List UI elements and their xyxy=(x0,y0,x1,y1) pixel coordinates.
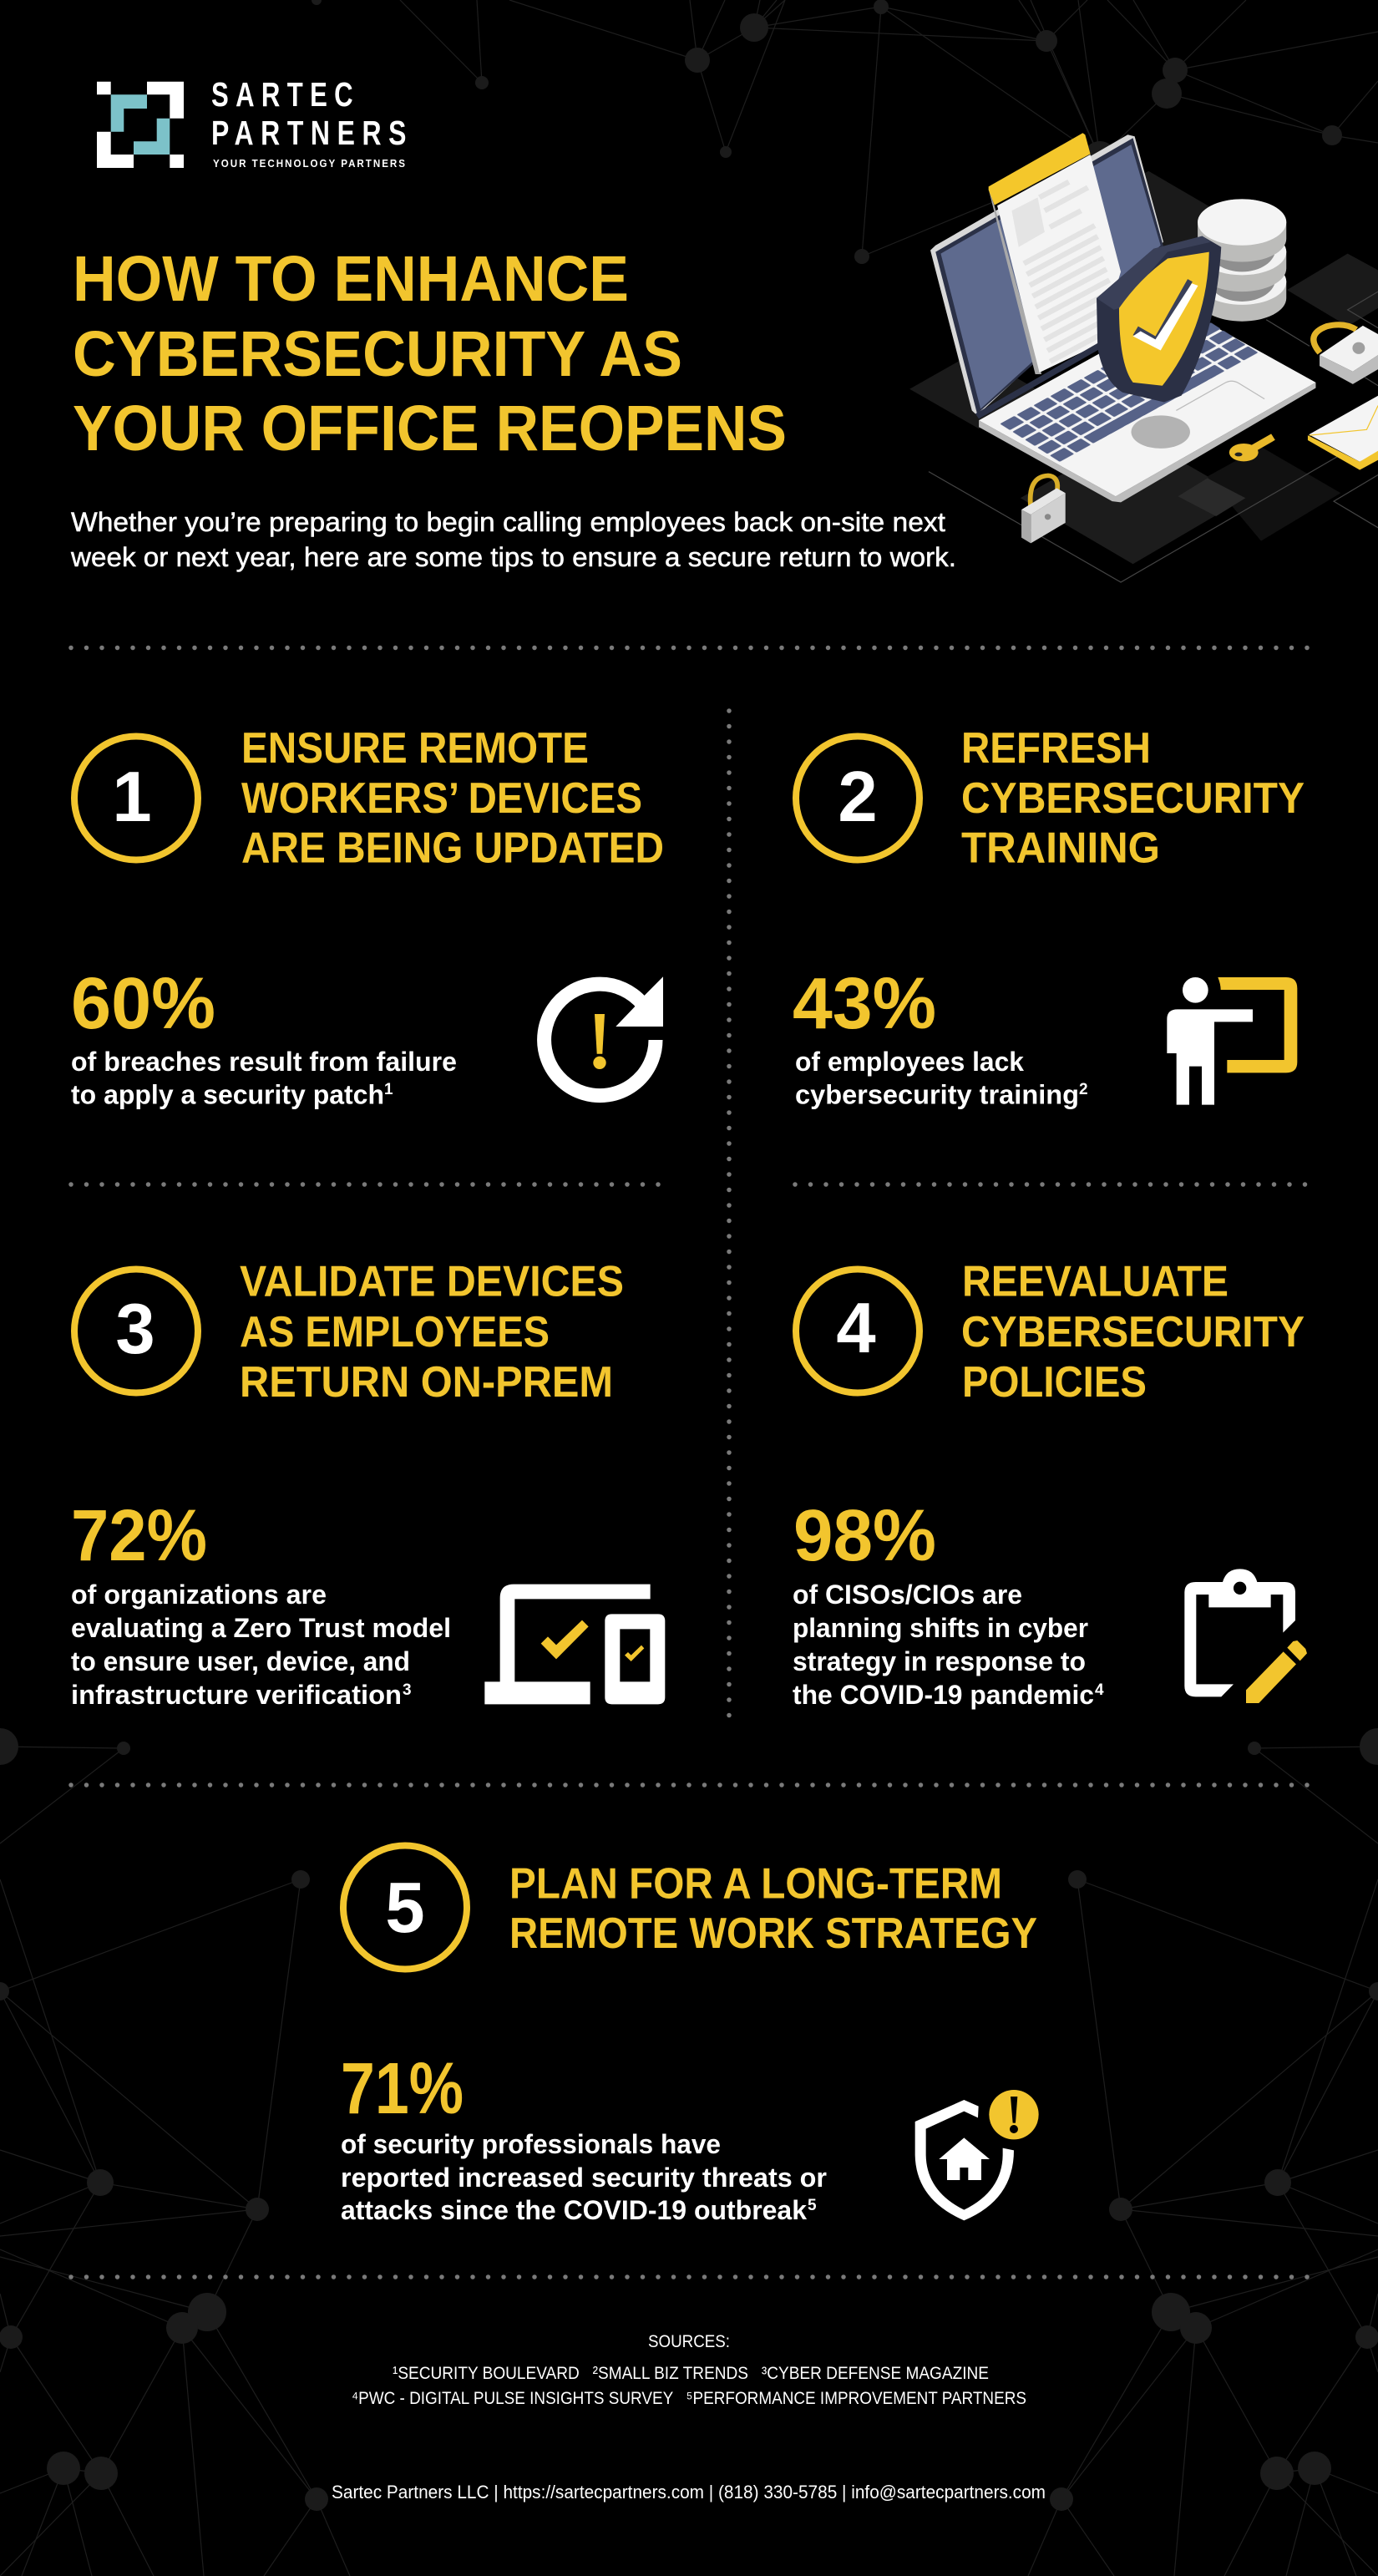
icon: clipboard and pencil xyxy=(1184,1569,1307,1703)
stat text 4: planning shifts in cyber xyxy=(793,1613,1088,1643)
laptop base and keyboard xyxy=(975,308,1315,502)
title: YOUR OFFICE REOPENS xyxy=(73,393,787,464)
stat 98%: 98% xyxy=(793,1495,936,1576)
stat text 3: 3 xyxy=(403,1681,412,1699)
database stack xyxy=(1198,199,1286,322)
icon: refresh with alert xyxy=(545,976,663,1096)
stat text 4: the COVID-19 pandemic xyxy=(793,1680,1094,1710)
heading 3: AS EMPLOYEES xyxy=(240,1308,550,1356)
logo xyxy=(97,75,413,170)
stat text 5: of security professionals have xyxy=(341,2129,721,2159)
intro text: Whether you’re preparing to begin calling employees back on-site next xyxy=(71,507,945,537)
stat text 1 xyxy=(71,1047,457,1109)
heading 3: VALIDATE DEVICES xyxy=(240,1258,624,1306)
footer contact line: Sartec Partners LLC | https://sartecpartners.com | (818) 330-5785 | info@sartecpartners.com xyxy=(332,2482,1046,2502)
stat text 1: to apply a security patch xyxy=(71,1079,384,1109)
panel: tip 4 xyxy=(793,1258,1307,1710)
panel: tip 1 xyxy=(71,724,664,1109)
title: CYBERSECURITY AS xyxy=(73,318,682,390)
dotted divider xyxy=(71,646,1308,650)
laptop screen xyxy=(930,134,1164,415)
number badge 1: 1 xyxy=(112,758,152,837)
number badge 5: 5 xyxy=(385,1869,425,1948)
icon: laptop and phone verified xyxy=(484,1585,665,1704)
stat text 5: 5 xyxy=(808,2197,817,2214)
stat text 2: cybersecurity training xyxy=(795,1079,1079,1109)
stat 71%: 71% xyxy=(341,2048,464,2129)
stat text 3: to ensure user, device, and xyxy=(71,1646,410,1676)
panel: tip 5 xyxy=(341,1846,1039,2225)
stat text 5: reported increased security threats or xyxy=(341,2163,827,2193)
dotted column divider xyxy=(727,711,732,1722)
stat 43%: 43% xyxy=(793,963,936,1044)
icon: shield with house and alert xyxy=(915,2090,1039,2220)
logo mark xyxy=(97,82,184,168)
number badge 3 xyxy=(74,1270,198,1393)
heading 1: ARE BEING UPDATED xyxy=(241,824,664,872)
heading 1: ENSURE REMOTE xyxy=(241,724,589,773)
stat text 2: of employees lack xyxy=(795,1047,1024,1077)
heading 4: CYBERSECURITY xyxy=(961,1308,1305,1356)
panel: tip 3 xyxy=(71,1258,665,1710)
number badge 5 xyxy=(343,1846,467,1970)
stat text 1: 1 xyxy=(384,1081,393,1098)
heading 3: RETURN ON-PREM xyxy=(240,1358,613,1407)
heading 2: CYBERSECURITY xyxy=(961,774,1305,823)
stat text 5 xyxy=(341,2129,827,2225)
stat text 3: infrastructure verification xyxy=(71,1680,402,1710)
stat text 2: 2 xyxy=(1079,1081,1088,1098)
number badge 4 xyxy=(796,1270,920,1393)
sources: ¹SECURITY BOULEVARD ²SMALL BIZ TRENDS ³CYBER DEFENSE MAGAZINE xyxy=(393,2364,989,2383)
stat 60%: 60% xyxy=(71,963,215,1044)
sources xyxy=(352,2332,1026,2408)
heading 5 xyxy=(509,1859,1037,1958)
heading 1: WORKERS’ DEVICES xyxy=(241,774,642,823)
stat text 2 xyxy=(795,1047,1088,1109)
title: HOW TO ENHANCE xyxy=(73,243,629,315)
left padlock xyxy=(1021,475,1066,543)
right padlock xyxy=(1314,325,1378,384)
logo wordmark: PARTNERS xyxy=(211,114,413,152)
number badge 3: 3 xyxy=(115,1290,155,1369)
sources: SOURCES: xyxy=(648,2332,730,2351)
heading 2: REFRESH xyxy=(961,724,1151,773)
stat text 5: attacks since the COVID-19 outbreak xyxy=(341,2195,807,2225)
heading 4 xyxy=(961,1258,1305,1407)
heading 1 xyxy=(241,724,664,872)
stat text 3: of organizations are xyxy=(71,1580,327,1610)
dotted divider xyxy=(71,2274,1308,2279)
logo wordmark: SARTEC xyxy=(211,75,360,114)
heading 3 xyxy=(240,1258,624,1407)
number badge 2: 2 xyxy=(838,758,878,837)
security shield xyxy=(1097,236,1221,403)
panel: tip 2 xyxy=(793,724,1305,1109)
dotted divider right xyxy=(795,1182,1308,1187)
dotted divider left xyxy=(71,1182,665,1187)
intro text: week or next year, here are some tips to ensure a secure return to work. xyxy=(70,542,956,572)
intro text xyxy=(70,507,956,572)
heading 2: TRAINING xyxy=(961,824,1160,872)
heading 4: POLICIES xyxy=(962,1358,1147,1407)
stat text 4: 4 xyxy=(1095,1681,1104,1699)
stat text 4 xyxy=(793,1580,1104,1710)
stat text 3: evaluating a Zero Trust model xyxy=(71,1613,451,1643)
heading 4: REEVALUATE xyxy=(962,1258,1229,1306)
key xyxy=(1229,437,1273,461)
background network: bottom right xyxy=(1028,1728,1378,2576)
stat text 3 xyxy=(71,1580,451,1710)
number badge 2 xyxy=(796,737,920,860)
dotted divider xyxy=(71,1782,1308,1787)
stat 72%: 72% xyxy=(71,1495,207,1576)
iso background tiles xyxy=(909,171,1378,582)
hero illustration: laptop with shield xyxy=(909,133,1378,582)
background network: top xyxy=(312,0,1378,264)
stat text 4: strategy in response to xyxy=(793,1646,1086,1676)
background network: bottom left xyxy=(0,1728,350,2576)
number badge 4: 4 xyxy=(836,1289,876,1368)
logo wordmark xyxy=(211,75,413,170)
logo wordmark: YOUR TECHNOLOGY PARTNERS xyxy=(213,157,407,170)
stat text 1: of breaches result from failure xyxy=(71,1047,457,1077)
heading 5: REMOTE WORK STRATEGY xyxy=(509,1909,1037,1958)
heading 5: PLAN FOR A LONG-TERM xyxy=(509,1859,1002,1908)
number badge 1 xyxy=(74,737,198,860)
title xyxy=(73,243,787,464)
envelope xyxy=(1308,396,1378,470)
icon: presenter with board xyxy=(1167,977,1297,1105)
heading 2 xyxy=(961,724,1305,872)
stat text 4: of CISOs/CIOs are xyxy=(793,1580,1022,1610)
sources: ⁴PWC - DIGITAL PULSE INSIGHTS SURVEY ⁵PERFORMANCE IMPROVEMENT PARTNERS xyxy=(352,2389,1026,2408)
document xyxy=(989,133,1121,374)
